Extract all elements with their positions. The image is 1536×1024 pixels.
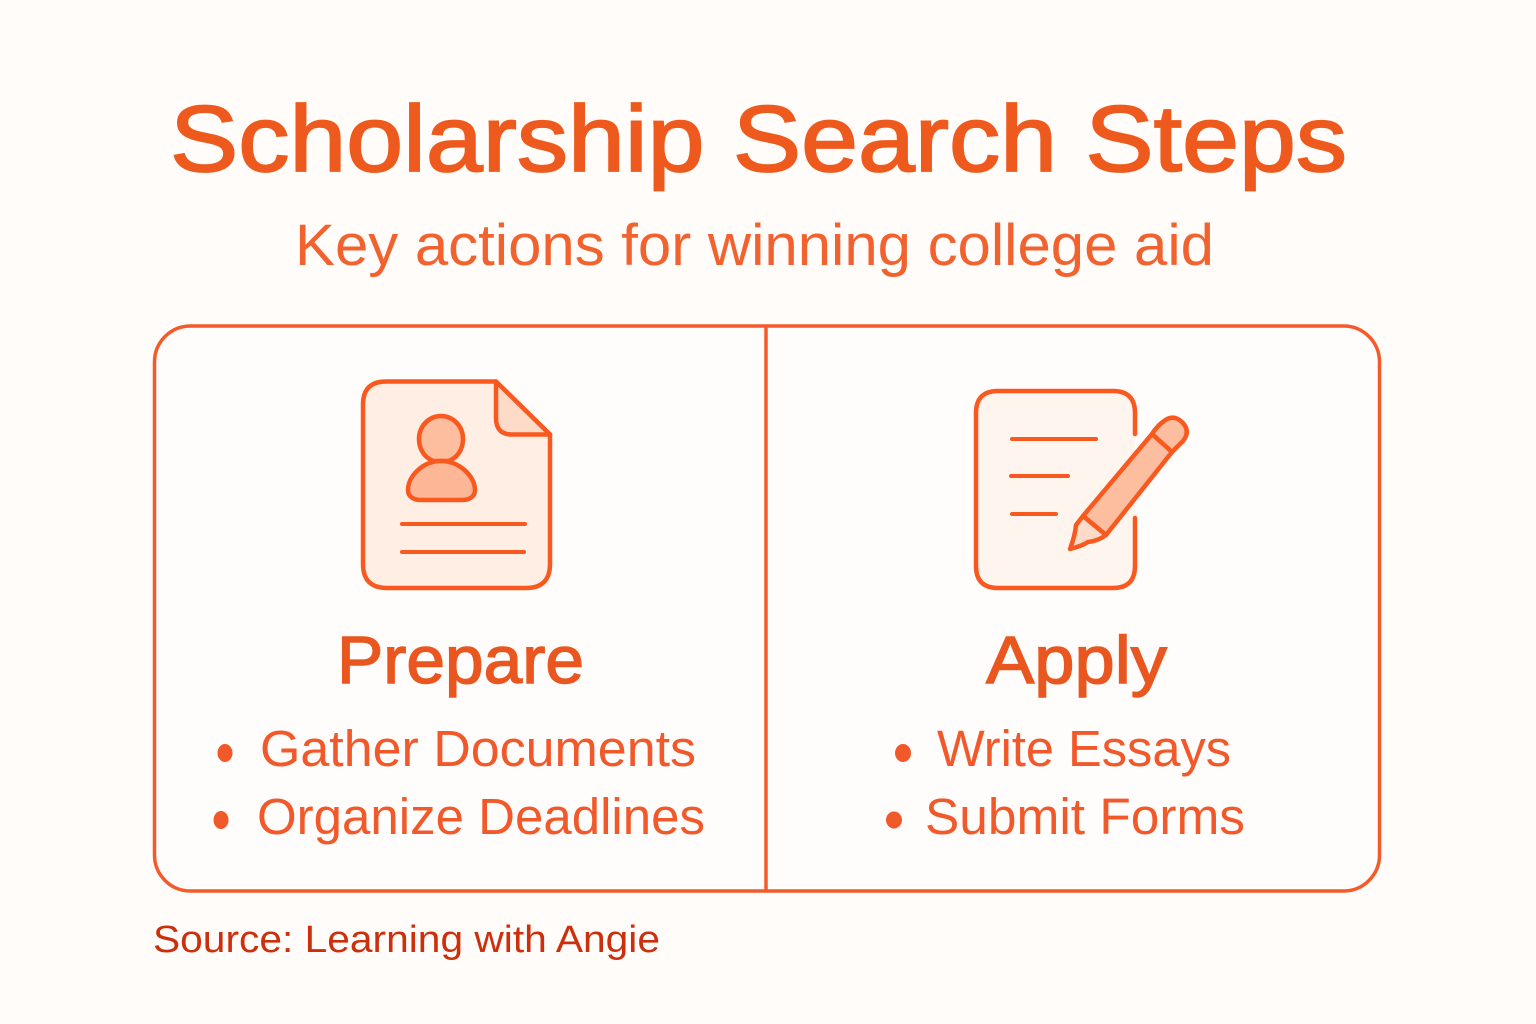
heading: apply: Apply	[986, 623, 1168, 698]
bullet list: prepare: Gather Documents	[260, 720, 696, 777]
icon: form and pencil	[976, 391, 1187, 588]
bullet list: prepare	[214, 720, 705, 845]
bullet list: prepare: Organize Deadlines	[257, 788, 705, 845]
title: Scholarship Search Steps	[170, 86, 1347, 191]
subtitle: Key actions for winning college aid	[295, 213, 1214, 278]
icon: document with person	[363, 382, 550, 588]
bullet list: apply: Write Essays	[937, 720, 1231, 777]
panel: two-column steps card	[154, 326, 1380, 891]
heading: prepare: Prepare	[337, 623, 584, 698]
panel: prepare	[214, 382, 705, 845]
panel: apply	[886, 391, 1245, 845]
bullet list: apply	[886, 720, 1245, 845]
bullet list: apply: Submit Forms	[925, 788, 1245, 845]
source note: Source: Learning with Angie	[153, 919, 660, 961]
